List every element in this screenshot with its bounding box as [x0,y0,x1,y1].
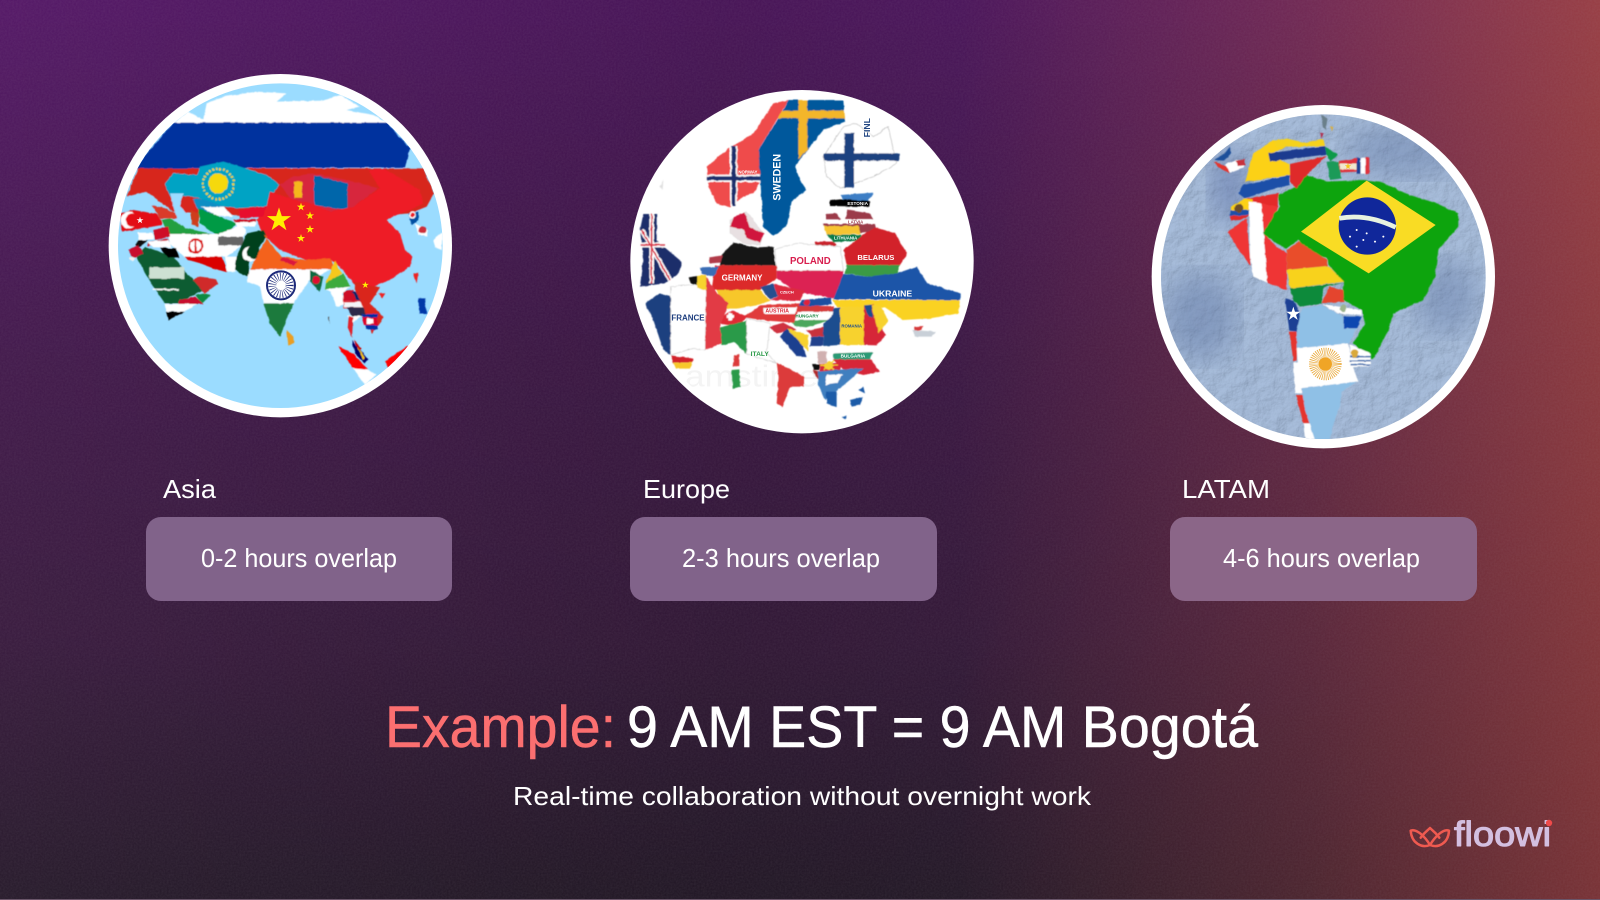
country labels: AUSTRIA [765,309,789,315]
country labels: ITALY [751,351,769,358]
country labels: LATVIA [848,219,864,224]
country labels: HUNGARY [795,314,820,319]
country labels: FRANCE [671,314,705,323]
map: Europe flags in circle [630,90,974,433]
country labels: BULGARIA [841,353,866,358]
label: Europe: Europe [643,474,730,504]
country labels: SWEDEN [772,154,784,201]
country labels: UKRAINE [873,288,912,298]
headline example: Example: [385,695,616,760]
badge: Asia overlap [146,517,452,601]
headline example: 9 AM EST = 9 AM Bogotá [627,695,1259,760]
country labels: FINL [862,117,872,137]
country labels: ESTONIA [847,201,869,206]
logo: floowi [1411,815,1552,854]
badge: Europe overlap [630,517,937,601]
country labels: GERMANY [722,274,763,283]
country labels: CZECH [780,290,794,295]
badge: Asia overlap: 0-2 hours overlap [201,543,397,573]
badge: Europe overlap: 2-3 hours overlap [682,543,880,573]
country labels: ROMANIA [841,323,863,328]
country labels: POLAND [790,256,831,267]
country labels: NORWAY [738,170,757,175]
subtitle: Real-time collaboration without overnight work [513,781,1092,811]
logo: floowi: floowi [1454,815,1551,854]
badge: LATAM overlap: 4-6 hours overlap [1223,543,1420,573]
country labels: LITHUANIA [834,236,858,241]
map: Asia flags in circle [108,74,452,418]
watermark: amstime [685,360,818,394]
label: LATAM: LATAM [1182,474,1270,504]
country labels: BELARUS [857,253,894,262]
map: LATAM flags on globe [1152,105,1495,448]
label: Asia: Asia [163,474,217,504]
country labels [671,117,912,358]
badge: LATAM overlap [1170,517,1477,601]
